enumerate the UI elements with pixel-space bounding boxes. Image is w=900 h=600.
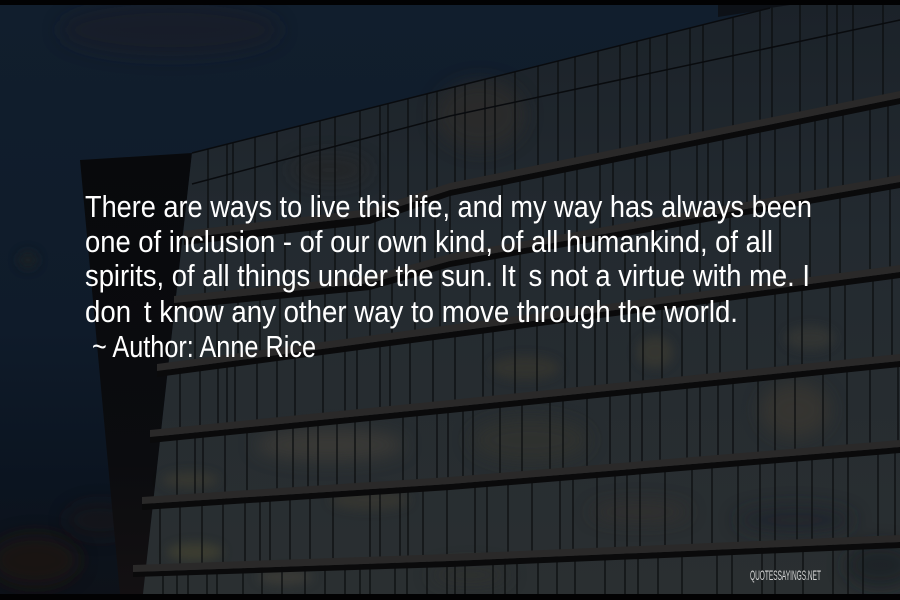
author attribution: ~ Author: Anne Rice xyxy=(92,329,316,364)
quote poster: QUOTESSAYINGS.NET xyxy=(750,567,821,583)
quote text: There are ways to live this life, and my way has always been xyxy=(85,189,812,224)
roof edge and upper rail xyxy=(192,8,900,184)
quote text: don’ t know any other way to move through the world. xyxy=(85,294,738,329)
corner wedge above roof xyxy=(718,5,795,17)
quote text xyxy=(85,189,812,329)
floor slabs xyxy=(133,91,900,577)
quote text: spirits, of all things under the sun. It’ s not a virtue with me. I xyxy=(85,258,810,293)
quote text: one of inclusion - of our own kind, of all humankind, of all xyxy=(85,224,773,259)
bottom letterbox bar xyxy=(0,594,900,600)
building side wall xyxy=(80,153,192,594)
window reflections xyxy=(162,80,900,587)
top letterbox bar xyxy=(0,0,900,5)
